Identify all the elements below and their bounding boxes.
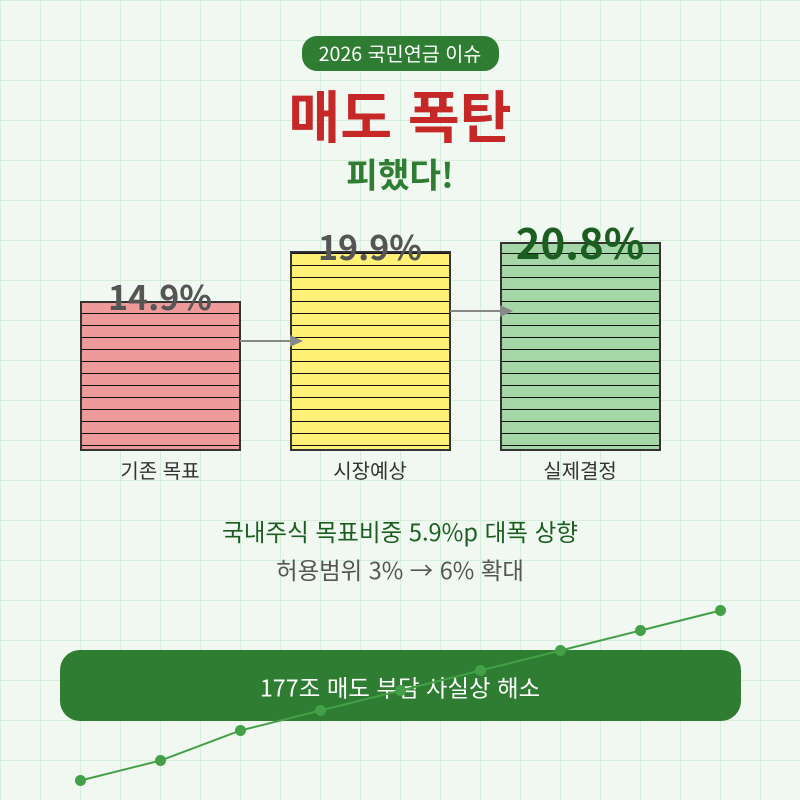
arrow: 시장예상 to 실제결정 bbox=[450, 305, 513, 317]
bar: 실제결정 20.8%: 20.8% bbox=[516, 211, 644, 272]
line chart: rising trend bbox=[75, 605, 726, 786]
badge: 2026 국민연금 이슈: 2026 국민연금 이슈 bbox=[319, 38, 481, 67]
text: 허용범위: 허용범위 3% → 6% 확대 bbox=[276, 552, 524, 586]
bar chart bbox=[81, 211, 660, 484]
bar: 기존 목표 14.9%: 14.9% bbox=[108, 271, 212, 320]
title: 매도 폭탄 bbox=[288, 74, 512, 154]
arrow: 기존 목표 to 시장예상 bbox=[240, 335, 303, 347]
callout: 177조 매도 부담 사실상 해소 bbox=[60, 650, 741, 721]
bar: 실제결정 20.8% bbox=[501, 211, 660, 484]
bar: 시장예상 19.9%: 시장예상 bbox=[333, 455, 407, 484]
callout: 177조 매도 부담 사실상 해소: 177조 매도 부담 사실상 해소 bbox=[260, 670, 540, 704]
bar: 시장예상 19.9%: 19.9% bbox=[318, 221, 422, 270]
badge: 2026 국민연금 이슈 bbox=[302, 36, 499, 71]
bar: 기존 목표 14.9% bbox=[81, 271, 240, 484]
subtitle: 피했다! bbox=[346, 148, 454, 198]
bar: 기존 목표 14.9%: 기존 목표 bbox=[120, 455, 200, 484]
text: 국내주식 목표비중: 국내주식 목표비중 5.9%p 대폭 상향 bbox=[222, 514, 578, 548]
bar: 시장예상 19.9% bbox=[291, 221, 450, 484]
bar: 실제결정 20.8%: 실제결정 bbox=[543, 455, 617, 484]
